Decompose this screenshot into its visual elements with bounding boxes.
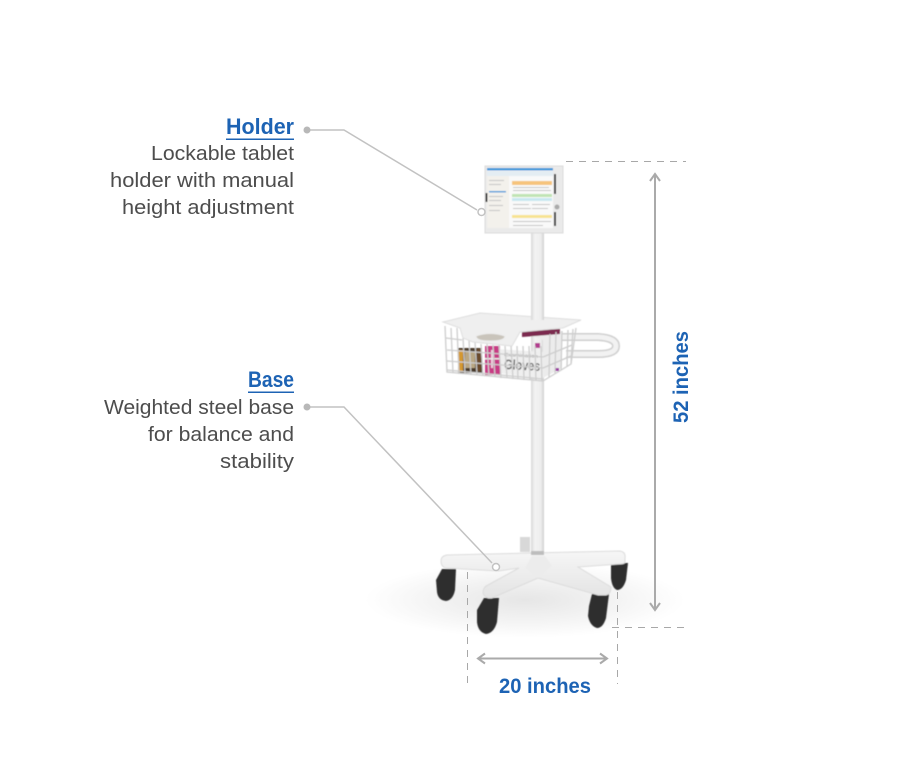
cart illustration <box>436 166 628 634</box>
bottles <box>458 348 482 373</box>
holder heading: Holder <box>226 114 294 139</box>
width dimension guides <box>468 572 618 684</box>
pole collar <box>531 551 544 555</box>
base description: stability <box>220 451 294 473</box>
pole collar above tray <box>531 313 544 320</box>
height dimension guides <box>566 162 686 628</box>
cart floor shadow <box>365 562 685 638</box>
base leader line <box>307 407 500 570</box>
pole <box>531 228 544 556</box>
rear caster post <box>520 537 530 552</box>
gloves box: Examination <box>504 352 539 359</box>
pink box <box>485 346 500 375</box>
basket top tray <box>443 313 581 346</box>
callout: holder <box>110 114 485 219</box>
base description <box>104 397 294 473</box>
holder description: Lockable tablet <box>151 143 294 165</box>
height label: 52 inches <box>670 331 693 423</box>
tablet holder <box>485 166 563 233</box>
height arrow <box>650 174 660 610</box>
gloves box: Gloves <box>504 356 541 374</box>
tray handle slot <box>476 334 505 341</box>
gloves box <box>498 329 562 379</box>
base heading: Base <box>248 367 294 392</box>
base description: for balance and <box>148 424 294 446</box>
width arrow <box>478 654 607 664</box>
width label: 20 inches <box>499 675 591 698</box>
five-star base <box>441 551 625 598</box>
holder description: height adjustment <box>122 197 294 219</box>
casters <box>436 563 628 634</box>
holder description: holder with manual <box>110 170 294 192</box>
holder description <box>110 143 294 219</box>
holder leader line <box>307 130 485 216</box>
rear handle <box>560 337 616 354</box>
wire basket <box>445 326 576 381</box>
callout: base <box>104 367 500 570</box>
base description: Weighted steel base <box>104 397 294 419</box>
